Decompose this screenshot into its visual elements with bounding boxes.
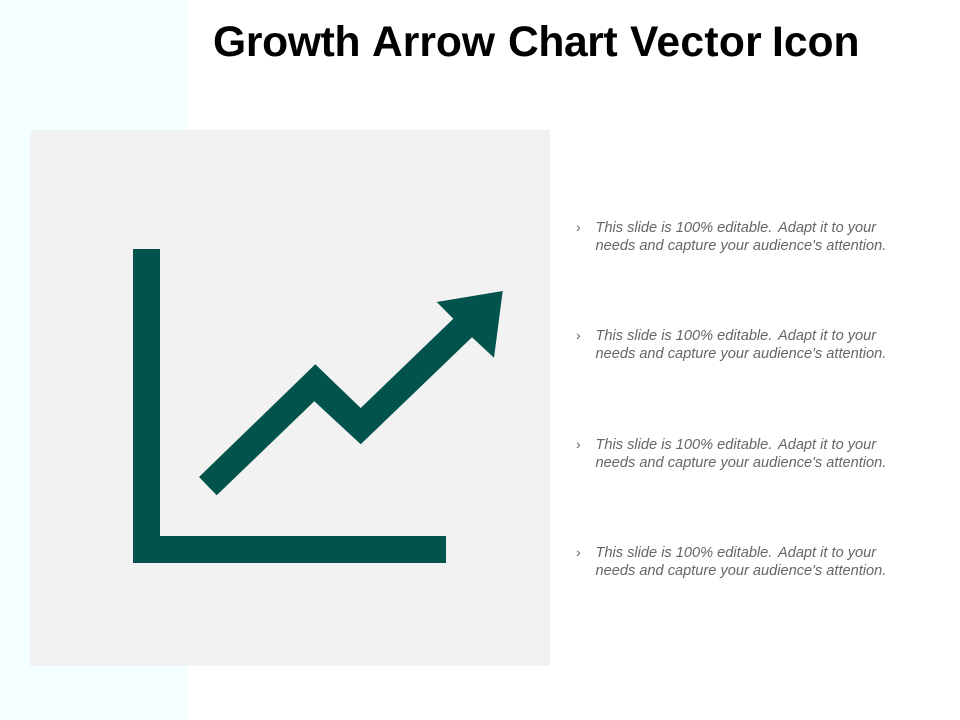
text block: bullet 2: needs and capture your audience's attention. <box>596 346 886 362</box>
text block: bullet 3: › <box>576 436 581 452</box>
title <box>213 18 860 66</box>
text block: bullet 3: This slide is 100% editable. Adapt it to your <box>596 437 876 453</box>
text block: bullet 1: needs and capture your audience's attention. <box>596 238 886 254</box>
text block: bullet 1: › <box>576 219 581 235</box>
text block: bullet 4: needs and capture your audience's attention. <box>596 563 886 579</box>
title: Growth <box>213 18 360 66</box>
text block: bullet 4: This slide is 100% editable. Adapt it to your <box>596 545 876 561</box>
panel: icon background <box>30 130 550 666</box>
text block: bullet 3: needs and capture your audience's attention. <box>596 455 886 471</box>
text block: bullet 1 <box>576 219 886 254</box>
text block: bullet 2 <box>576 327 886 362</box>
rising zigzag arrow <box>199 291 503 495</box>
title: Arrow <box>372 18 495 66</box>
text block: bullet 2: This slide is 100% editable. Adapt it to your <box>596 328 876 344</box>
title: Chart <box>508 18 617 66</box>
left background band <box>0 0 188 720</box>
title: Icon <box>772 18 860 66</box>
text block: bullet 3 <box>576 436 886 471</box>
text block: bullet 2: › <box>576 327 581 343</box>
title: Vector <box>630 18 762 66</box>
chart axes <box>133 249 446 563</box>
text block: bullet 4: › <box>576 544 581 560</box>
text block: bullet 1: This slide is 100% editable. Adapt it to your <box>596 220 876 236</box>
text block: bullet 4 <box>576 544 886 579</box>
